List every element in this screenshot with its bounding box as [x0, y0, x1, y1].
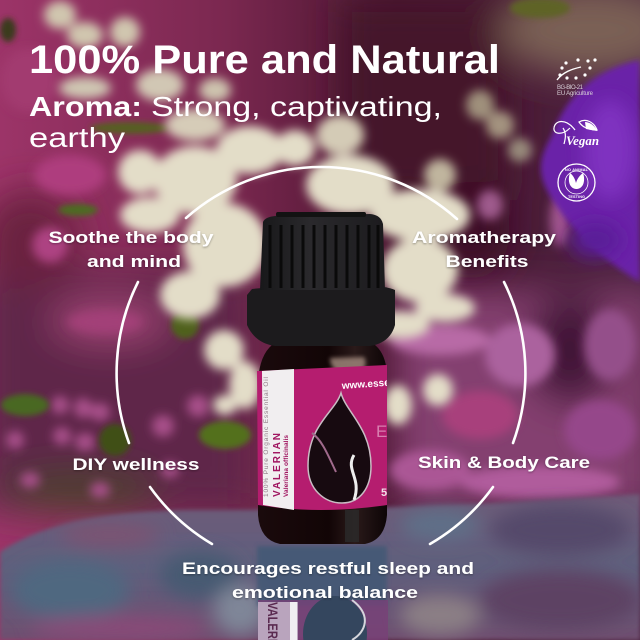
label side text [263, 376, 290, 497]
subtitle: aroma: Aroma: [29, 91, 142, 122]
cap lower collar [247, 285, 395, 346]
label partial letters: E [376, 422, 387, 441]
purple flower [541, 60, 640, 282]
green foliage [0, 0, 570, 456]
bottle reflection [257, 546, 388, 640]
icon: no animal testing: TESTING [568, 195, 585, 199]
label: 5 [381, 487, 387, 499]
benefit: aromatherapy benefits: Benefits [446, 252, 528, 271]
product: valerian essential oil bottle [247, 212, 408, 544]
lower flower field [0, 190, 640, 510]
pink blossoms [0, 48, 636, 498]
icon: EU organic leaf: EU Agriculture [557, 91, 594, 97]
label side text: 100% Pure Organic Essential Oil [263, 376, 270, 497]
icon: no animal testing [558, 164, 595, 201]
benefit: aromatherapy benefits [412, 228, 557, 271]
icon: EU organic leaf: BG-BIO-21 [557, 85, 584, 91]
subtitle: aroma [29, 91, 442, 153]
benefit: diy wellness: DIY wellness [72, 455, 200, 474]
reflective table surface [0, 494, 640, 640]
benefit: restful sleep and emotional balance: Encourages restful sleep and [182, 559, 474, 578]
benefit: soothe the body and mind: and mind [87, 252, 181, 271]
benefit: skin and body care: Skin & Body Care [418, 453, 590, 472]
icon: EU organic leaf [557, 58, 597, 97]
dark upper-right backdrop [340, 0, 640, 280]
droplet window [308, 393, 371, 503]
droplet wisps [351, 455, 356, 500]
website text: www.essence [340, 376, 408, 392]
icon: no animal testing: NO ANIMAL [565, 168, 589, 172]
icon: vegan: Vegan [566, 133, 599, 148]
benefit: aromatherapy benefits: Aromatherapy [412, 228, 557, 247]
subtitle: aroma: Strong, captivating, [151, 91, 442, 122]
label side text: Valeriana officinalis [283, 435, 290, 497]
bottle base highlight [345, 510, 359, 542]
shoulder highlight [330, 357, 366, 373]
cap upper ribbed [260, 212, 385, 290]
circular arc segments [117, 167, 525, 544]
title: 100% Pure and Natural [29, 38, 500, 82]
benefit: restful sleep and emotional balance: emotional balance [232, 583, 418, 602]
white blossoms [44, 1, 532, 425]
icon: vegan [554, 120, 599, 148]
benefit: soothe the body and mind: Soothe the body [48, 228, 214, 247]
bottle base glass [258, 345, 387, 544]
label white strip [262, 369, 294, 510]
label side text: VALERIAN [272, 433, 283, 497]
subtitle: aroma: earthy [29, 122, 125, 153]
benefit: soothe the body and mind [48, 228, 214, 271]
benefit: restful sleep and emotional balance [182, 559, 474, 602]
label [257, 365, 387, 510]
